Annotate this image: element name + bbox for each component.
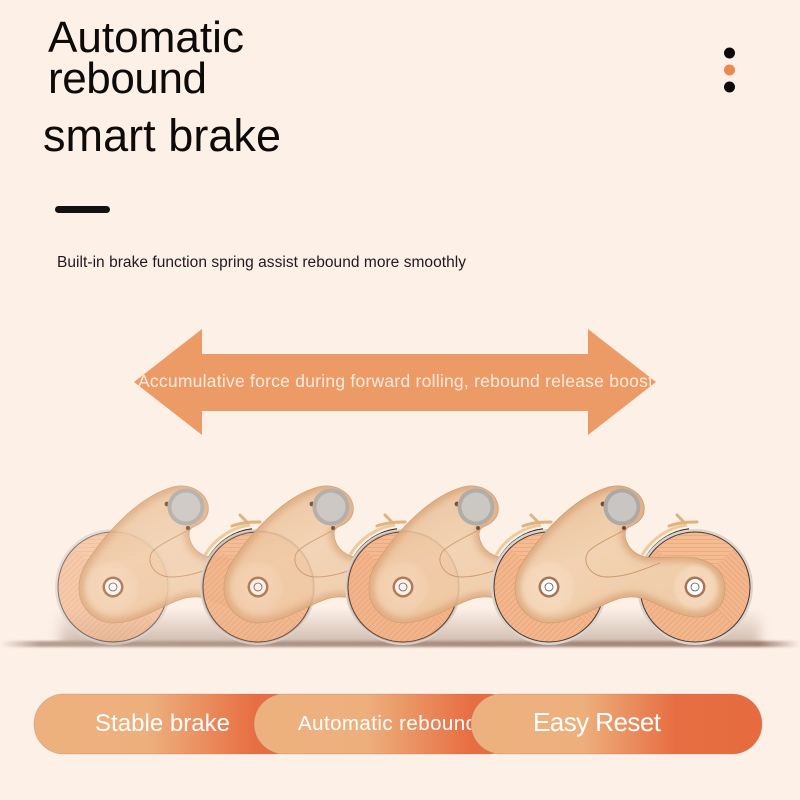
pagination dots xyxy=(724,48,735,92)
pill: stable brake: Stable brake xyxy=(95,710,230,737)
arrow shape xyxy=(134,329,656,435)
solid roller body xyxy=(515,486,725,623)
pill: easy reset xyxy=(471,694,762,754)
pill: stable brake xyxy=(34,694,304,754)
solid front wheel xyxy=(637,515,753,645)
feature pills xyxy=(34,694,762,754)
ghost wheel overlays xyxy=(202,531,459,643)
ghost position 1 wheel xyxy=(55,529,171,645)
pill: easy reset: Easy Reset xyxy=(533,707,662,737)
double-headed arrow with caption xyxy=(134,329,656,435)
ghost roller body 1 xyxy=(79,486,289,623)
ghost roller body 3 xyxy=(369,486,579,623)
description text: Built-in brake function spring assist rebound more smoothly xyxy=(57,254,466,271)
title: smart brake xyxy=(43,110,281,161)
solid position 4 rear wheel xyxy=(491,515,607,645)
title: Automatic xyxy=(48,13,244,62)
ghost roller body 2 xyxy=(224,486,434,623)
accent bar xyxy=(55,206,110,213)
ground shadow xyxy=(0,608,800,647)
title xyxy=(43,13,281,161)
ghost position 3 wheel xyxy=(345,515,461,645)
product sequence: ab roller wheels xyxy=(55,486,753,645)
ghost position 2 wheel xyxy=(200,515,316,645)
arrow caption: Accumulative force during forward rolling, rebound release boost xyxy=(138,371,653,391)
pill: automatic rebound: Automatic rebound xyxy=(298,712,477,735)
title: rebound xyxy=(48,54,207,103)
pill: automatic rebound xyxy=(254,694,519,754)
